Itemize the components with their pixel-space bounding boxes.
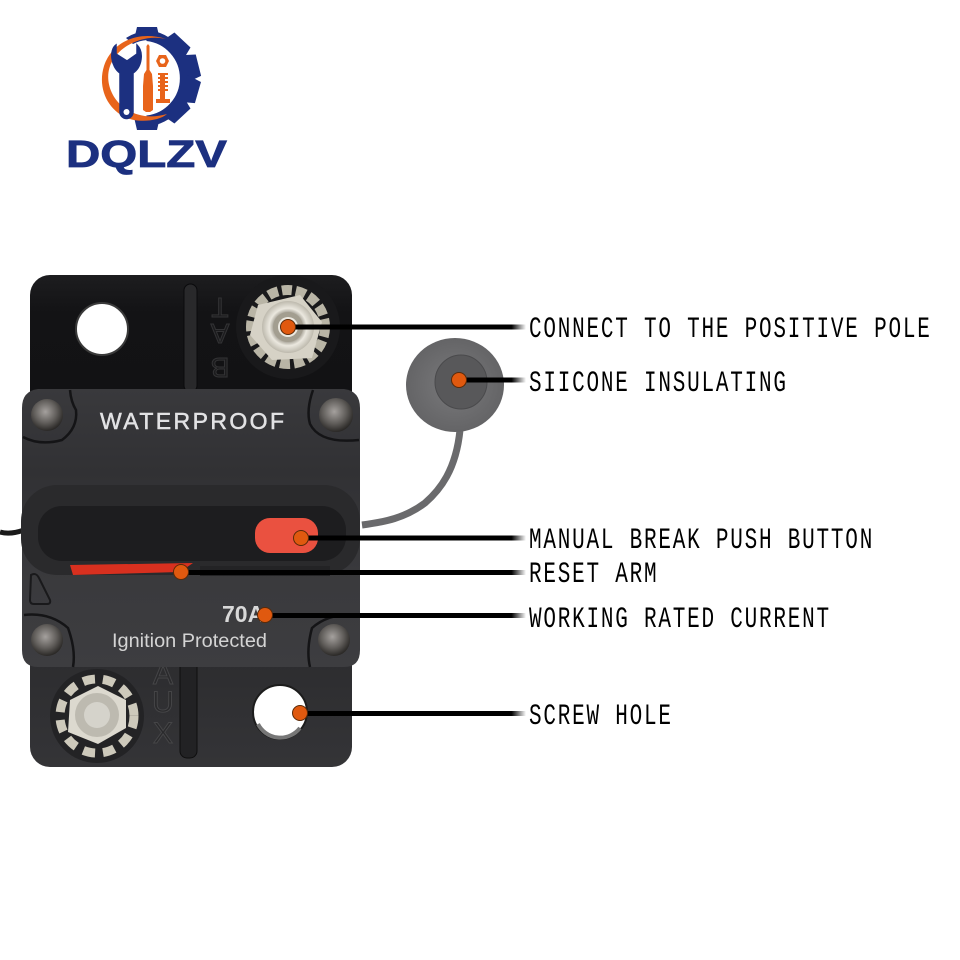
BAT marking: A: [210, 318, 229, 349]
AUX marking: [152, 658, 174, 750]
icon: wrench: [112, 45, 141, 119]
callout: positive pole: CONNECT TO THE POSITIVE POLE: [529, 312, 932, 346]
callout: silicone insulating: SIICONE INSULATING: [529, 366, 788, 400]
lower ridge: [180, 660, 197, 758]
top terminal: [236, 275, 340, 379]
BAT marking: B: [211, 352, 229, 383]
AUX marking: U: [152, 686, 174, 719]
Ignition Protected: Ignition Protected: [112, 631, 267, 652]
callout: screw hole: [292, 699, 673, 733]
icon: silicone cap: [406, 338, 504, 432]
screw: bottom left: [31, 624, 63, 656]
panel: cover: [22, 389, 360, 667]
icon: orange arc: [102, 36, 167, 121]
icon: blue gear: [126, 27, 202, 130]
rating 70A: 70A: [222, 601, 264, 627]
mounting hole: top: [76, 303, 128, 355]
top ridge: [184, 284, 197, 392]
small triangle mark: [30, 574, 50, 604]
screw recess outlines: [23, 390, 360, 667]
callout: positive pole: [280, 312, 932, 346]
BAT marking: T: [211, 292, 229, 323]
BAT marking: [210, 292, 229, 383]
circuit breaker body: [21, 275, 360, 767]
logo: DQLZV: [66, 27, 228, 176]
reset arm shadow: [200, 566, 330, 576]
icon: bolt and nut: [156, 55, 170, 103]
AUX marking: X: [153, 717, 173, 750]
icon: screwdriver: [143, 44, 153, 112]
callout: working rated current: [258, 602, 831, 636]
panel: base plate: [30, 275, 352, 525]
WATERPROOF text: WATERPROOF: [100, 408, 284, 434]
callout: screw hole: SCREW HOLE: [529, 699, 673, 733]
icon: left wire stub: [0, 530, 24, 533]
screw: top right: [319, 398, 353, 432]
cable and silicone cap: [362, 338, 504, 525]
callout: working rated current: WORKING RATED CURRENT: [529, 602, 831, 636]
screw: bottom right: [318, 624, 350, 656]
panel: button band: [21, 485, 360, 575]
mounting hole: bottom: [253, 685, 307, 739]
AUX marking: A: [153, 658, 173, 691]
callout: manual break push button: [294, 523, 874, 557]
reset arm: [70, 563, 193, 575]
screw: top left: [31, 399, 63, 431]
bottom terminal: [50, 669, 144, 763]
callout: reset arm: [174, 557, 658, 591]
manual break button: [255, 518, 318, 553]
logo wordmark: DQLZV: [66, 134, 228, 176]
callout: manual break push button: MANUAL BREAK PUSH BUTTON: [529, 523, 874, 557]
panel: button slot: [38, 506, 346, 561]
callout: reset arm: RESET ARM: [529, 557, 658, 591]
